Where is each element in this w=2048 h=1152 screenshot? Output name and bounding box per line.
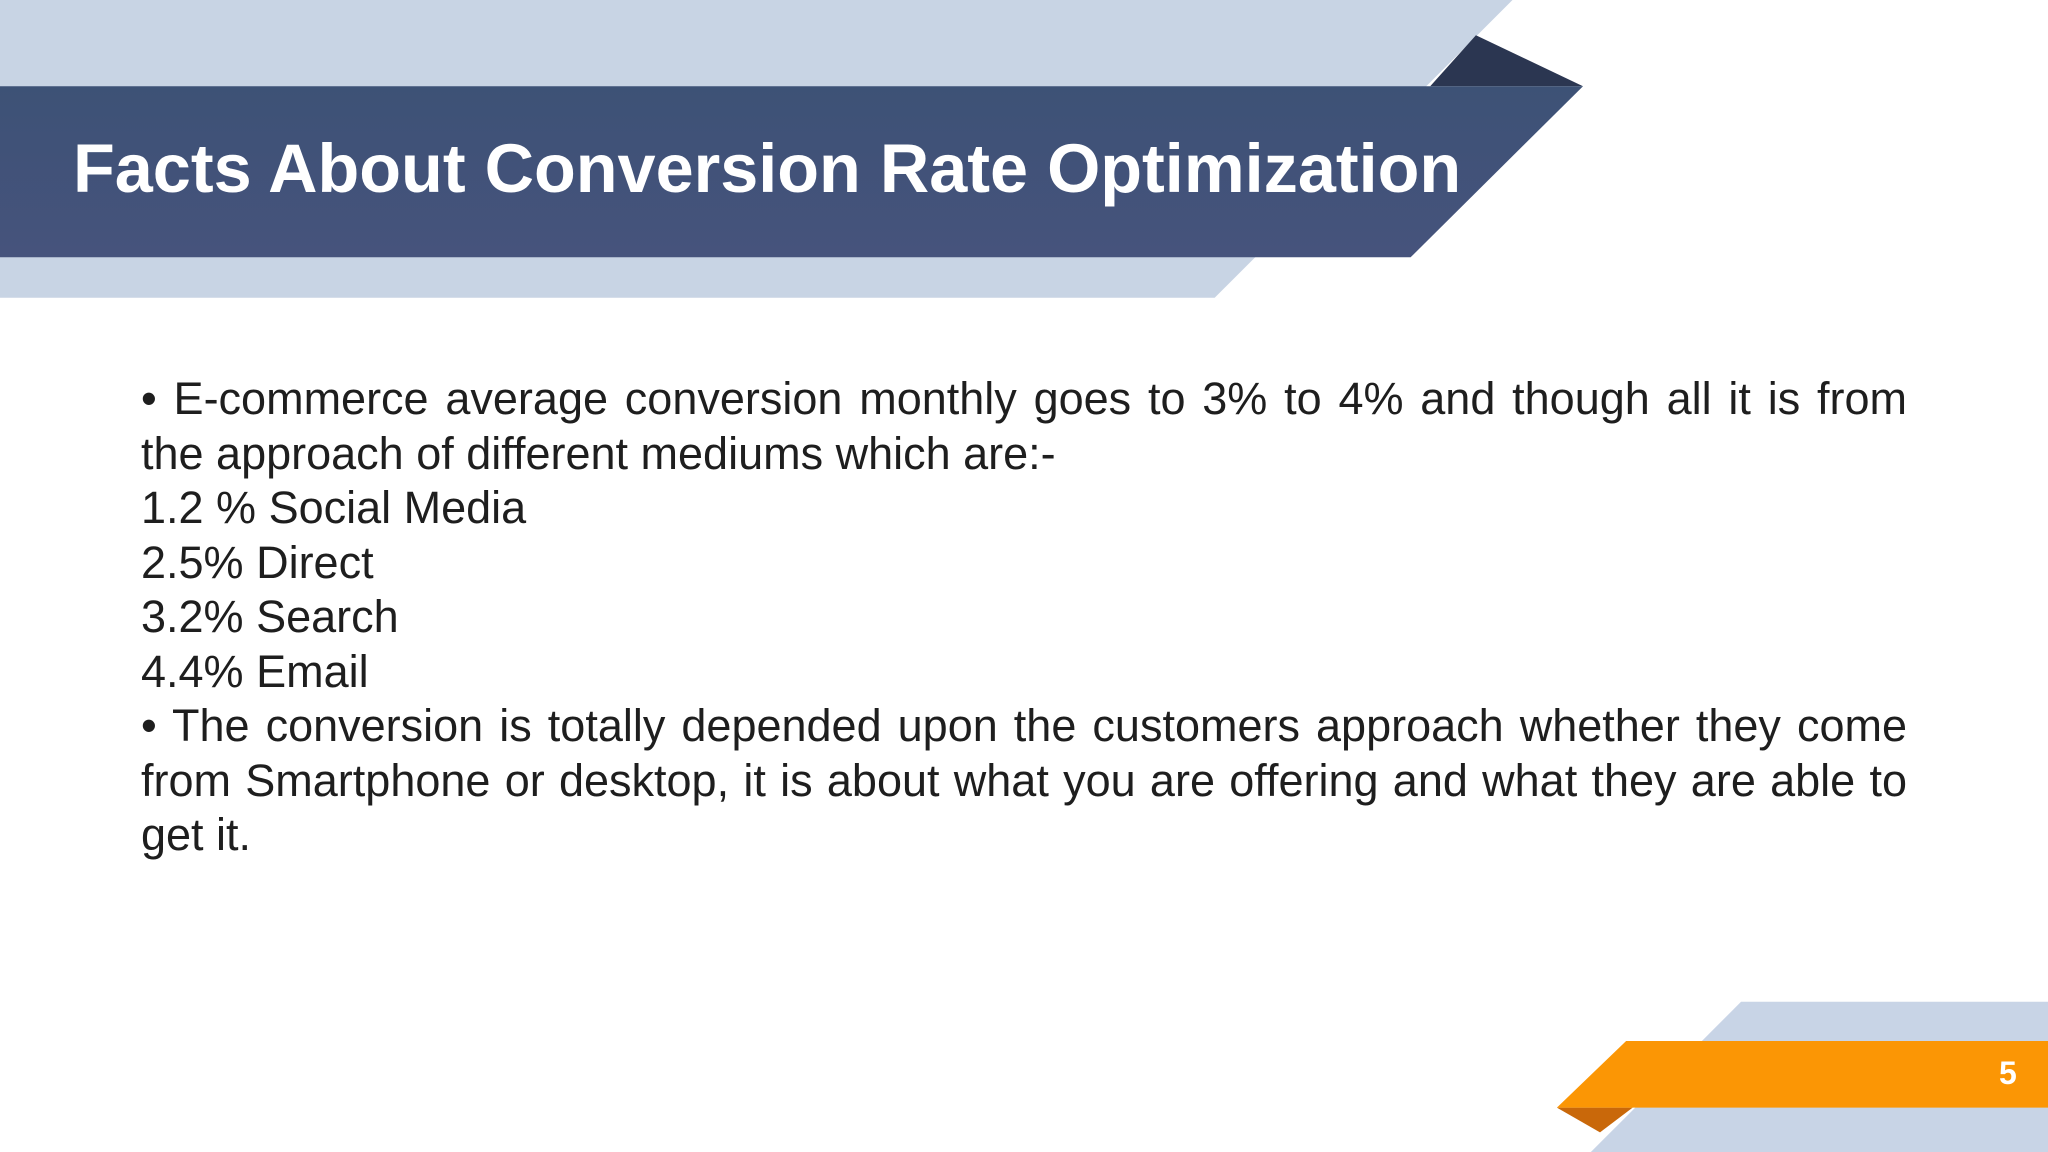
title: Facts About Conversion Rate Optimization [73,131,1461,207]
text block: body: • E-commerce average conversion monthly goes to 3% to 4% and though all it is from the approach of different mediums which are:- [141,373,1907,478]
text block: body: 3.2% Search [141,591,399,642]
text block: body: 1.2 % Social Media [141,482,526,533]
text block: body: 4.4% Email [141,646,369,696]
text block: body [141,373,1907,860]
page number: 5 [1999,1055,2017,1091]
text block: body: 2.5% Direct [141,536,374,588]
text block: body: • The conversion is totally depended upon the customers approach whether they come from Smartphone or desktop, it is about what you are offering and what they are able to get it. [141,700,1907,860]
